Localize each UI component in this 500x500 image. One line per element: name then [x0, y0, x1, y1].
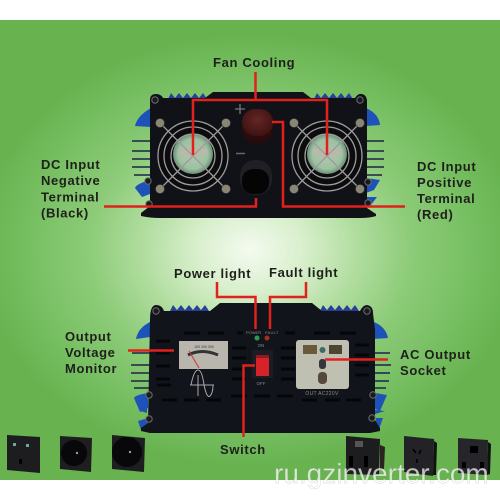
minus sign [236, 152, 245, 154]
top inverter [132, 92, 384, 218]
red positive terminal [242, 109, 273, 143]
fault LED [264, 336, 270, 340]
socket 4 [346, 436, 385, 475]
output voltage meter: 100 200 300 [194, 345, 214, 349]
off label: OFF [256, 381, 266, 386]
fan cooling callout [193, 72, 327, 155]
housing [141, 92, 376, 218]
plus sign [235, 104, 245, 114]
label: DC Input Positive Terminal (Red): Positive [417, 175, 472, 190]
heat sink fins bottom inverter [131, 353, 391, 388]
socket 3 [112, 435, 145, 472]
power and fault labels [246, 330, 279, 335]
label: Power light: Power light [174, 266, 251, 281]
power light callout [217, 282, 256, 329]
rocker switch [252, 350, 273, 378]
AC socket [296, 340, 349, 389]
black negative terminal [240, 160, 272, 195]
socket voltage label: OUT AC220V [305, 391, 339, 397]
output voltage callout [128, 349, 174, 352]
switch callout [244, 366, 255, 437]
red callout lines [104, 72, 405, 437]
label: DC Input Positive Terminal (Red): Terminal [417, 191, 475, 206]
socket 6 [458, 438, 491, 475]
label: Switch: Switch [220, 442, 266, 457]
socket 2 [60, 436, 92, 472]
fan right [290, 118, 364, 194]
label: Output Voltage Monitor: Voltage [65, 345, 116, 360]
power LED [254, 336, 260, 340]
bottom inverter [131, 303, 391, 433]
watermark: ru.gzinverter.com [274, 458, 489, 489]
fault light callout [270, 282, 306, 329]
on label: ON [258, 343, 264, 348]
socket 1 [7, 435, 40, 473]
ac socket callout [325, 358, 388, 361]
output voltage meter [179, 341, 228, 369]
vent slots [156, 333, 369, 400]
housing [141, 303, 380, 433]
power and fault labels: FAULT [265, 330, 279, 335]
label: Fan Cooling: Fan Cooling [213, 55, 295, 70]
label: DC Input Negative Terminal (Black): DC Input [41, 157, 100, 172]
dc positive callout [272, 122, 405, 206]
label: DC Input Positive Terminal (Red): (Red) [417, 207, 453, 222]
power and fault labels: POWER [246, 330, 261, 335]
heat sink fins top inverter [132, 141, 384, 175]
label: AC Output Socket: AC Output [400, 347, 471, 362]
label: Output Voltage Monitor: Monitor [65, 361, 117, 376]
fan left [156, 118, 230, 194]
label: Output Voltage Monitor: Output [65, 329, 112, 344]
label: DC Input Positive Terminal (Red): DC Input [417, 159, 476, 174]
label: DC Input Negative Terminal (Black): (Black) [41, 206, 89, 221]
label: Fault light: Fault light [269, 265, 338, 280]
sine wave symbol [190, 370, 214, 397]
label: DC Input Negative Terminal (Black): Terminal [41, 189, 99, 204]
dc negative callout [104, 198, 256, 206]
label: DC Input Negative Terminal (Black): Negative [41, 173, 100, 188]
socket 5 [404, 436, 437, 476]
label: AC Output Socket: Socket [400, 363, 447, 378]
